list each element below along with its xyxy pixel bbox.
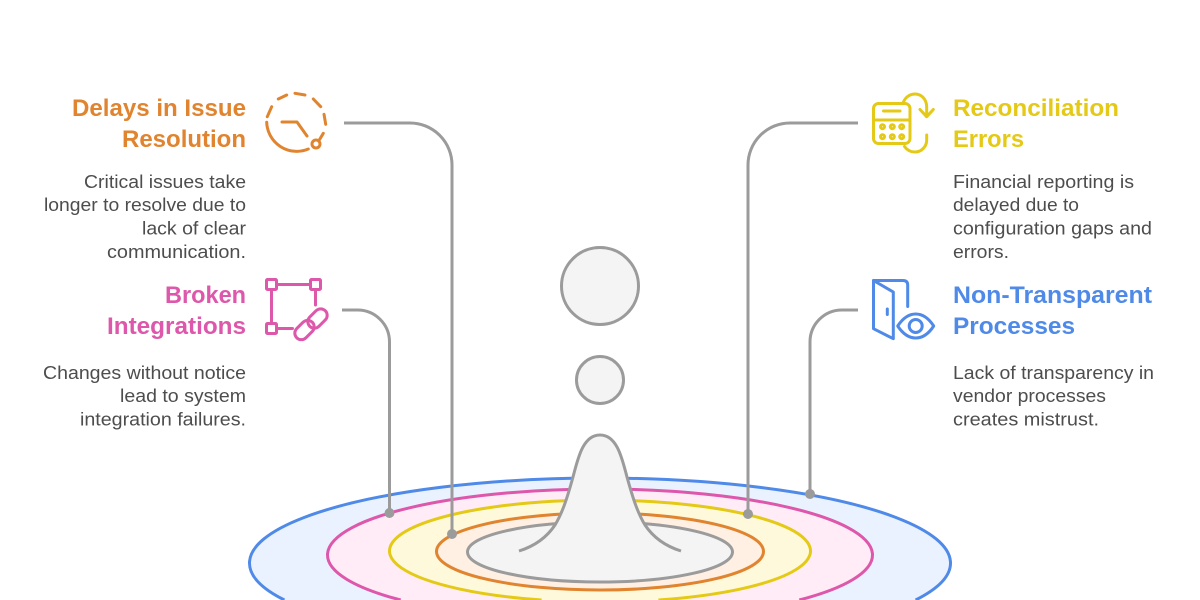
icon: dashed clock	[267, 93, 326, 151]
panel: broken integrations	[43, 280, 330, 430]
ring: yellow	[390, 500, 810, 600]
description: vendor processes	[953, 386, 1106, 406]
panel: non-transparent processes	[874, 280, 1154, 430]
description	[44, 172, 246, 262]
description	[43, 363, 246, 430]
icon: door and eye	[874, 280, 934, 339]
description: lead to system	[120, 386, 246, 406]
connector: integrations to pink ring	[342, 310, 394, 518]
ring: gray centre	[468, 522, 732, 582]
description: integration failures.	[80, 410, 246, 430]
description	[953, 172, 1152, 262]
icon: calculator with cycle arrows	[874, 94, 933, 152]
heading: Processes	[953, 313, 1075, 340]
heading	[72, 95, 246, 153]
heading: Reconciliation	[953, 95, 1119, 122]
description	[953, 363, 1154, 430]
large droplet	[562, 248, 638, 324]
ring: orange	[436, 513, 764, 590]
description: creates mistrust.	[953, 410, 1099, 430]
ring: pink	[328, 489, 873, 600]
description: Critical issues take	[84, 172, 246, 192]
heading: Delays in Issue	[72, 95, 246, 122]
connector: delays to orange ring	[344, 123, 457, 539]
description: communication.	[107, 242, 246, 262]
small droplet	[576, 356, 624, 404]
icon: nodes and chain link	[266, 280, 330, 342]
water drop splash peak	[519, 435, 681, 551]
heading	[107, 282, 246, 340]
description: delayed due to	[953, 195, 1079, 215]
description: Changes without notice	[43, 363, 246, 383]
heading	[953, 95, 1119, 153]
heading: Broken	[165, 282, 246, 309]
heading: Non-Transparent	[953, 282, 1152, 309]
description: longer to resolve due to	[44, 195, 246, 215]
connector: non-transparent to blue ring	[805, 310, 858, 499]
description: Lack of transparency in	[953, 363, 1154, 383]
panel: reconciliation errors	[874, 94, 1152, 262]
ring: blue	[250, 478, 950, 600]
panel: delays in issue resolution	[44, 93, 326, 262]
heading: Errors	[953, 126, 1024, 153]
connector: reconciliation to yellow ring	[743, 123, 858, 519]
description: Financial reporting is	[953, 172, 1134, 192]
heading	[953, 282, 1152, 340]
heading: Integrations	[107, 313, 246, 340]
description: configuration gaps and	[953, 218, 1152, 238]
concentric ripple rings	[250, 478, 950, 600]
description: lack of clear	[142, 218, 246, 238]
description: errors.	[953, 242, 1009, 262]
heading: Resolution	[122, 126, 246, 153]
